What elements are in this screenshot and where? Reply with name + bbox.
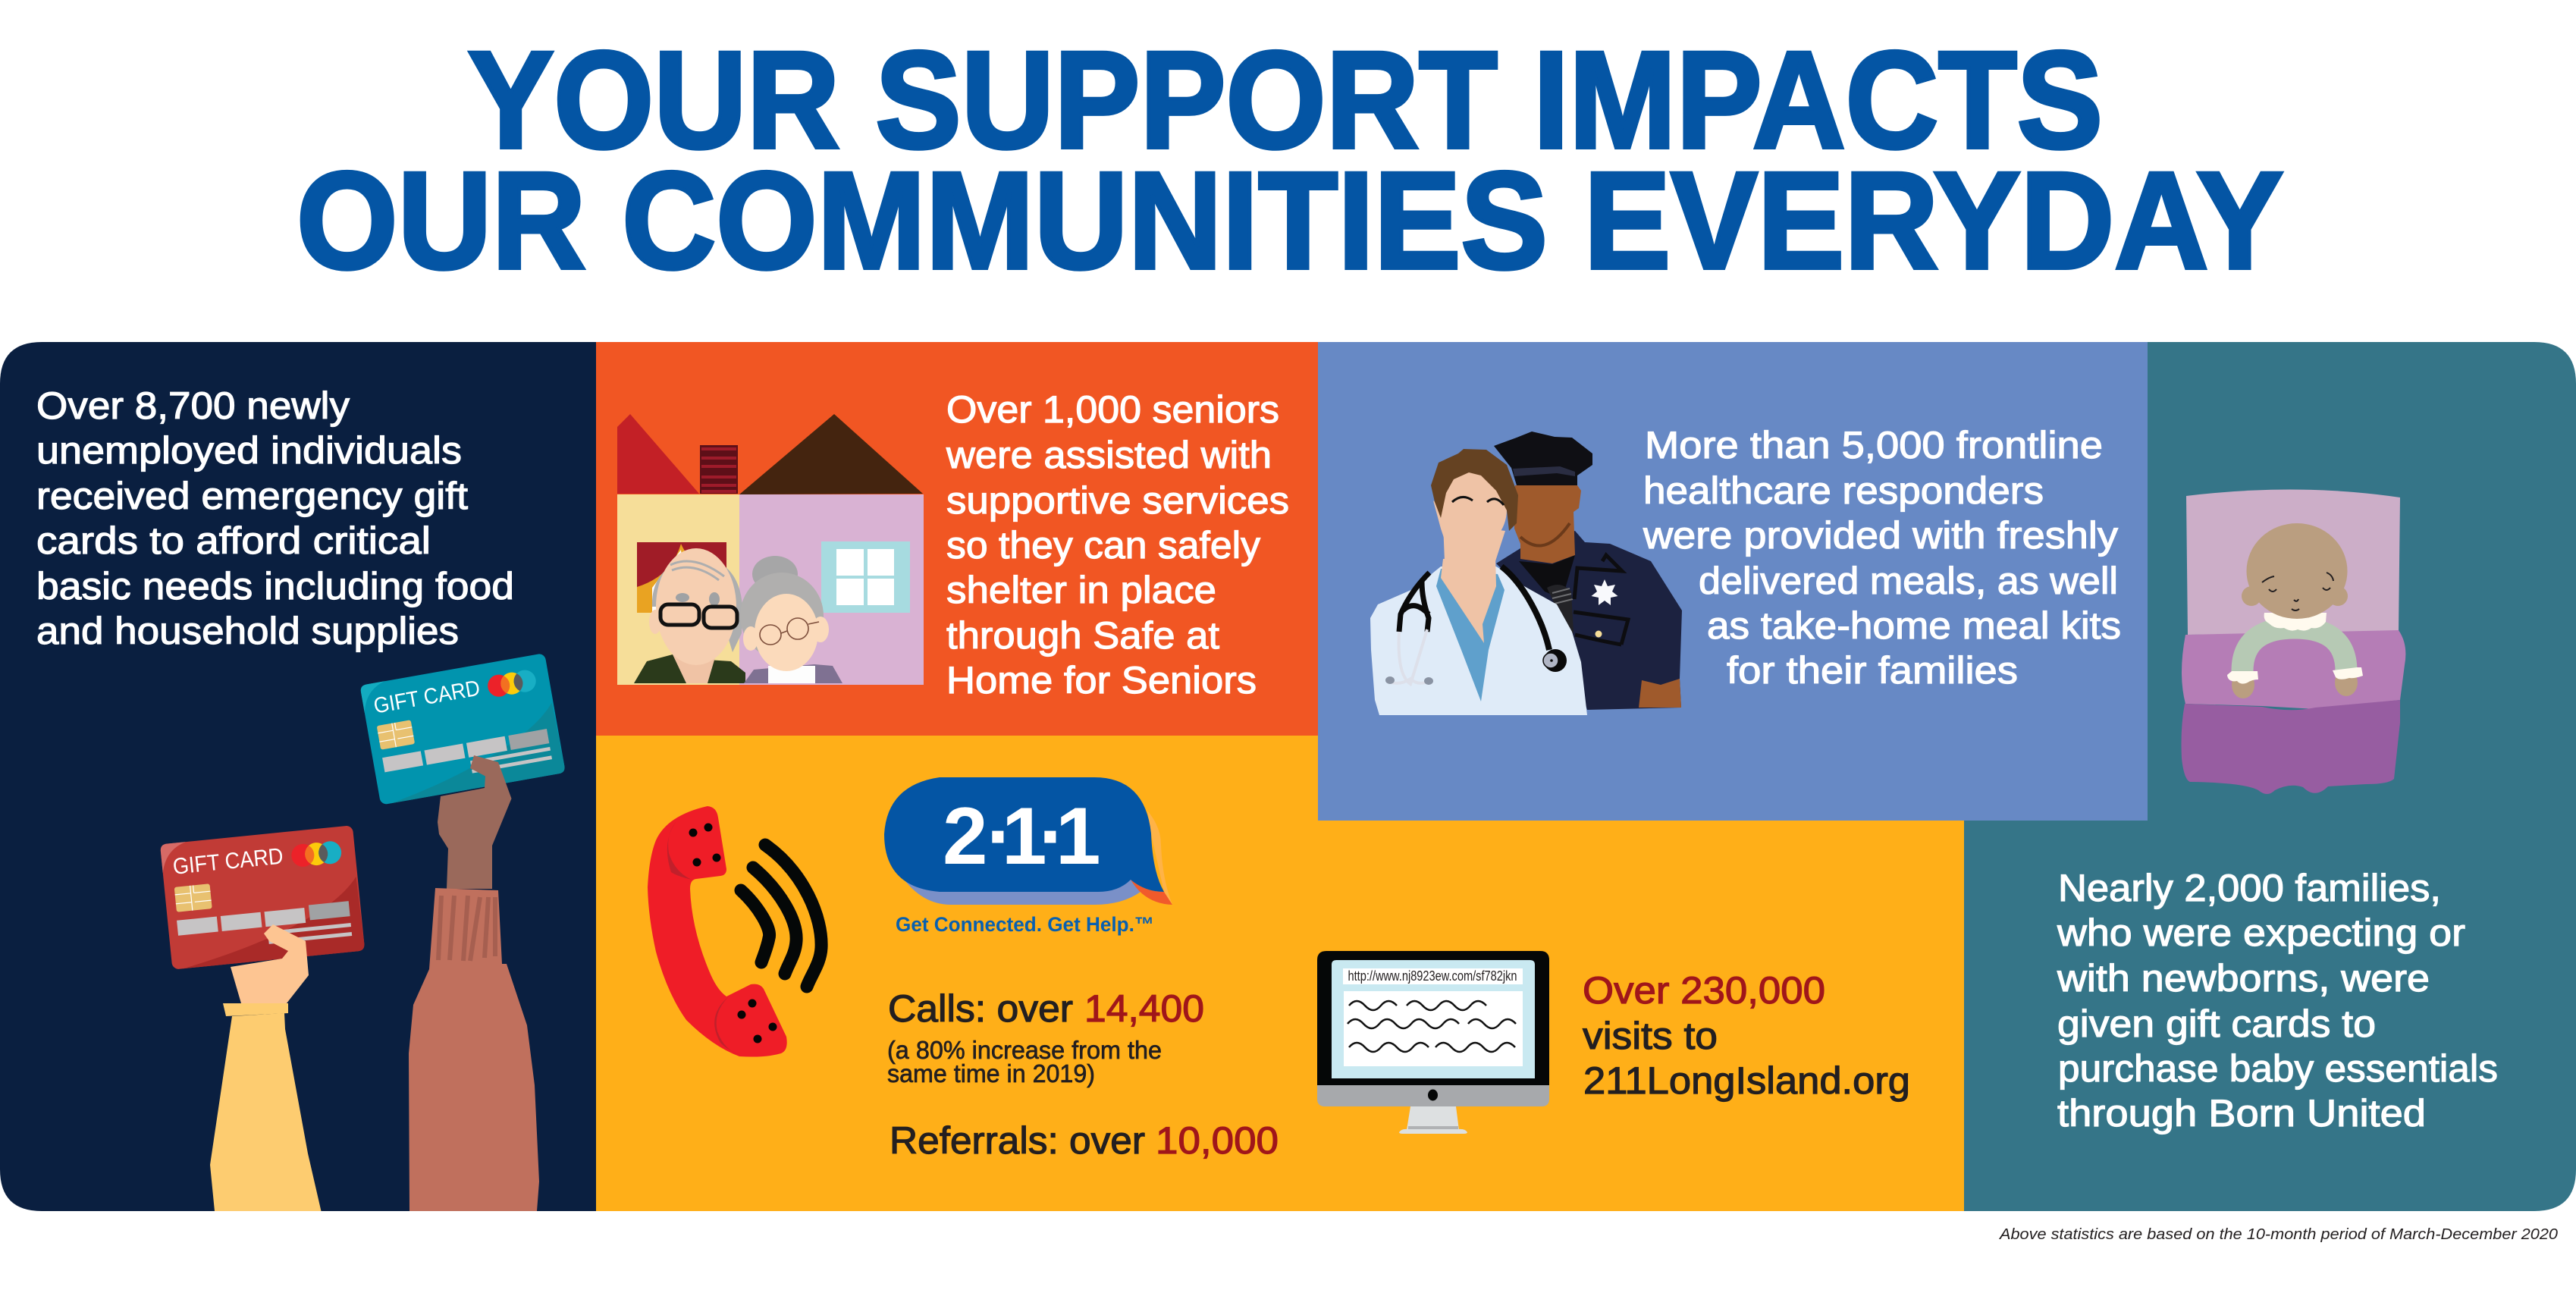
icon: houses with senior couple — [617, 414, 924, 685]
text: calls statistic: same time in 2019) — [887, 1059, 1095, 1087]
text: frontline statistic: More than 5,000 frontline — [1645, 424, 2103, 466]
icon: brown sleeved arm holding teal card — [409, 755, 539, 1211]
text: frontline statistic: healthcare responders — [1643, 469, 2044, 512]
text: frontline statistic — [1643, 424, 2121, 692]
text: referrals statistic: Referrals: over — [890, 1119, 1145, 1162]
icon: teal gift card: GIFT CARD — [372, 676, 482, 719]
logo: 2-1-1 speech bubble: 2·1·1 — [943, 790, 1101, 881]
text: newborn statistic: who were expecting or — [2057, 912, 2465, 954]
icon: red telephone — [648, 806, 821, 1057]
title — [297, 23, 2283, 297]
text: newborn statistic — [2057, 867, 2498, 1135]
text: seniors statistic — [946, 388, 1289, 701]
text: seniors statistic: through Safe at — [946, 614, 1219, 657]
text: gift card statistic: unemployed individuals — [36, 429, 462, 472]
text: referrals statistic — [890, 1119, 1279, 1162]
illustration: doctor with stethoscope — [1370, 449, 1587, 715]
text: calls statistic: 14,400 — [1084, 987, 1204, 1030]
text: frontline statistic: as take-home meal kits — [1707, 604, 2121, 647]
text: newborn statistic: Nearly 2,000 families, — [2058, 867, 2441, 909]
text: seniors statistic: supportive services — [946, 479, 1289, 522]
panel: teal newborn families — [1964, 342, 2576, 1211]
icon: teal gift card — [359, 653, 566, 805]
icon: desktop computer — [1317, 951, 1549, 1134]
panel: orange seniors — [596, 342, 1318, 736]
text: frontline statistic: were provided with freshly — [1643, 514, 2118, 557]
icon: desktop computer: http://www.nj8923ew.com/sf782jkn — [1348, 968, 1517, 984]
text: gift card statistic: and household supplies — [36, 610, 459, 652]
panel: unemployed gift cards — [0, 342, 596, 1211]
text: website visits statistic: 211LongIsland.org — [1583, 1059, 1910, 1102]
icon: red gift card — [160, 825, 365, 970]
text: website visits statistic: Over 230,000 — [1583, 969, 1825, 1012]
text: website visits statistic: visits to — [1583, 1015, 1718, 1057]
text: newborn statistic: with newborns, were — [2057, 957, 2430, 1000]
text: seniors statistic: Home for Seniors — [946, 659, 1257, 701]
text: referrals statistic: 10,000 — [1156, 1119, 1279, 1162]
text: gift card statistic: basic needs including food — [36, 565, 514, 607]
text: calls statistic — [887, 987, 1204, 1087]
text: gift card statistic — [36, 384, 514, 652]
text: calls statistic: (a 80% increase from the — [887, 1036, 1162, 1064]
text: seniors statistic: so they can safely — [946, 524, 1260, 566]
footnote: Above statistics are based on the 10-month period of March-December 2020 — [1999, 1226, 2558, 1243]
text: gift card statistic: cards to afford critical — [36, 519, 431, 562]
title: YOUR SUPPORT IMPACTS — [468, 23, 2103, 177]
text: frontline statistic: for their families — [1727, 649, 2018, 692]
logo: 2-1-1 speech bubble: Get Connected. Get Help.™ — [896, 913, 1154, 936]
panel: periwinkle frontline responders — [1318, 342, 2148, 821]
illustration: senior woman — [740, 556, 842, 683]
icon: yellow sleeved arm holding red card — [210, 924, 322, 1211]
text: seniors statistic: were assisted with — [946, 434, 1272, 476]
text: newborn statistic: through Born United — [2057, 1092, 2426, 1135]
text: website visits statistic — [1583, 969, 1910, 1102]
text: gift card statistic: received emergency gift — [36, 475, 468, 517]
illustration: senior man — [634, 548, 745, 683]
text: gift card statistic: Over 8,700 newly — [36, 384, 350, 427]
illustration: police officer — [1494, 432, 1682, 710]
text: calls statistic: Calls: over — [888, 987, 1073, 1030]
title: OUR COMMUNITIES EVERYDAY — [297, 143, 2283, 297]
text: newborn statistic: purchase baby essentials — [2058, 1047, 2498, 1090]
text: seniors statistic: shelter in place — [946, 569, 1216, 611]
text: newborn statistic: given gift cards to — [2057, 1003, 2376, 1045]
panel: yellow 2-1-1 — [596, 736, 1964, 1211]
icon: sleeping baby in bed — [2181, 489, 2405, 794]
icon: red gift card: GIFT CARD — [171, 844, 284, 880]
text: frontline statistic: delivered meals, as well — [1699, 560, 2118, 602]
text: seniors statistic: Over 1,000 seniors — [946, 388, 1279, 431]
logo: 2-1-1 speech bubble — [884, 777, 1172, 936]
